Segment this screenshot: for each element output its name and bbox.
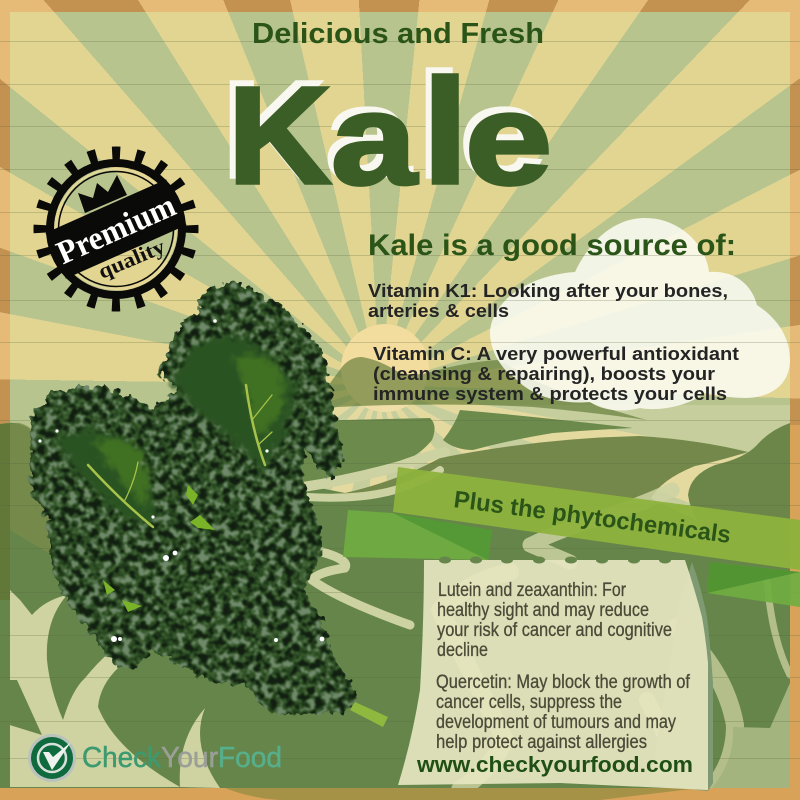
text block: Vitamin K1 (368, 280, 728, 321)
title shadow: l (416, 42, 463, 209)
paper holes (439, 556, 671, 564)
badge crown (78, 175, 127, 213)
kale veins (88, 385, 272, 527)
text block: quercetin: cancer cells, suppress the (436, 692, 622, 713)
paper sheet (398, 560, 708, 790)
kale white specks (38, 319, 324, 642)
title shadow: e (459, 61, 546, 206)
text block: quercetin: Quercetin: May block the growth of (436, 672, 691, 693)
Premium text: Premium (52, 188, 181, 272)
logo wordmark: Food (218, 742, 282, 774)
title shadow: a (325, 61, 412, 206)
text block: Vitamin K1: arteries & cells (368, 300, 509, 321)
title shadow: K (222, 53, 325, 207)
text block: lutein (437, 580, 672, 661)
title: Kale (222, 42, 552, 215)
text block: quercetin (436, 672, 691, 753)
ribbon label: Plus the phytochemicals (452, 486, 732, 549)
text block: lutein: healthy sight and may reduce (437, 600, 649, 621)
logo wordmark: Your (161, 742, 218, 774)
kale leaf photo (30, 280, 388, 727)
title letters (228, 48, 552, 215)
text block: Vitamin C: (cleansing & repairing), boosts your (373, 363, 715, 384)
quality text: quality (95, 234, 169, 284)
text block: lutein: your risk of cancer and cognitive (437, 620, 672, 641)
cloud (490, 218, 790, 410)
text block: Vitamin C: immune system & protects your cells (373, 383, 727, 404)
text block: quercetin: help protect against allergies (436, 732, 647, 753)
text block: lutein: Lutein and zeaxanthin: For (438, 580, 627, 601)
title shadow (222, 42, 546, 209)
kale smooth leaf areas (55, 336, 296, 528)
ribbon right tail (707, 562, 800, 607)
kale stem (350, 702, 388, 727)
kale body (30, 280, 360, 715)
light lower left shape (10, 590, 180, 787)
title letters: K (228, 59, 331, 213)
ribbon: phytochemicals (343, 467, 800, 607)
ribbon band (393, 467, 800, 570)
title letters: e (465, 67, 552, 212)
logo icon (28, 734, 76, 782)
title letters: l (422, 48, 469, 215)
bottom right corner (712, 683, 790, 788)
text block: Vitamin C (373, 343, 739, 404)
paper shadow (650, 562, 713, 791)
logo wordmark: Check (82, 742, 161, 774)
landscape: hills and roads (0, 357, 800, 800)
badge gear (40, 153, 192, 305)
logo wordmark (82, 742, 282, 774)
main dark ground (0, 423, 790, 800)
heading: Kale is a good source of: Kale is a good source of: (368, 229, 736, 262)
title letters: a (331, 67, 418, 212)
badge: premium quality (40, 153, 192, 305)
ribbon left tail (343, 510, 492, 560)
text block: Vitamin C: Vitamin C: A very powerful antioxidant (373, 343, 739, 364)
text block: quercetin: development of tumours and may (436, 712, 676, 733)
sun (341, 324, 429, 412)
website url: www.checkyourfood.com (416, 752, 693, 777)
text block: lutein: decline (437, 640, 488, 661)
text block: Vitamin K1: Vitamin K1: Looking after your bones, (368, 280, 728, 301)
note paper (398, 556, 713, 791)
logo: CheckYourFood (28, 734, 282, 782)
light roads (303, 452, 790, 790)
kale bright patches (103, 485, 215, 612)
badge band (46, 179, 186, 279)
heading: Delicious and Fresh: Delicious and Fresh (252, 18, 544, 50)
